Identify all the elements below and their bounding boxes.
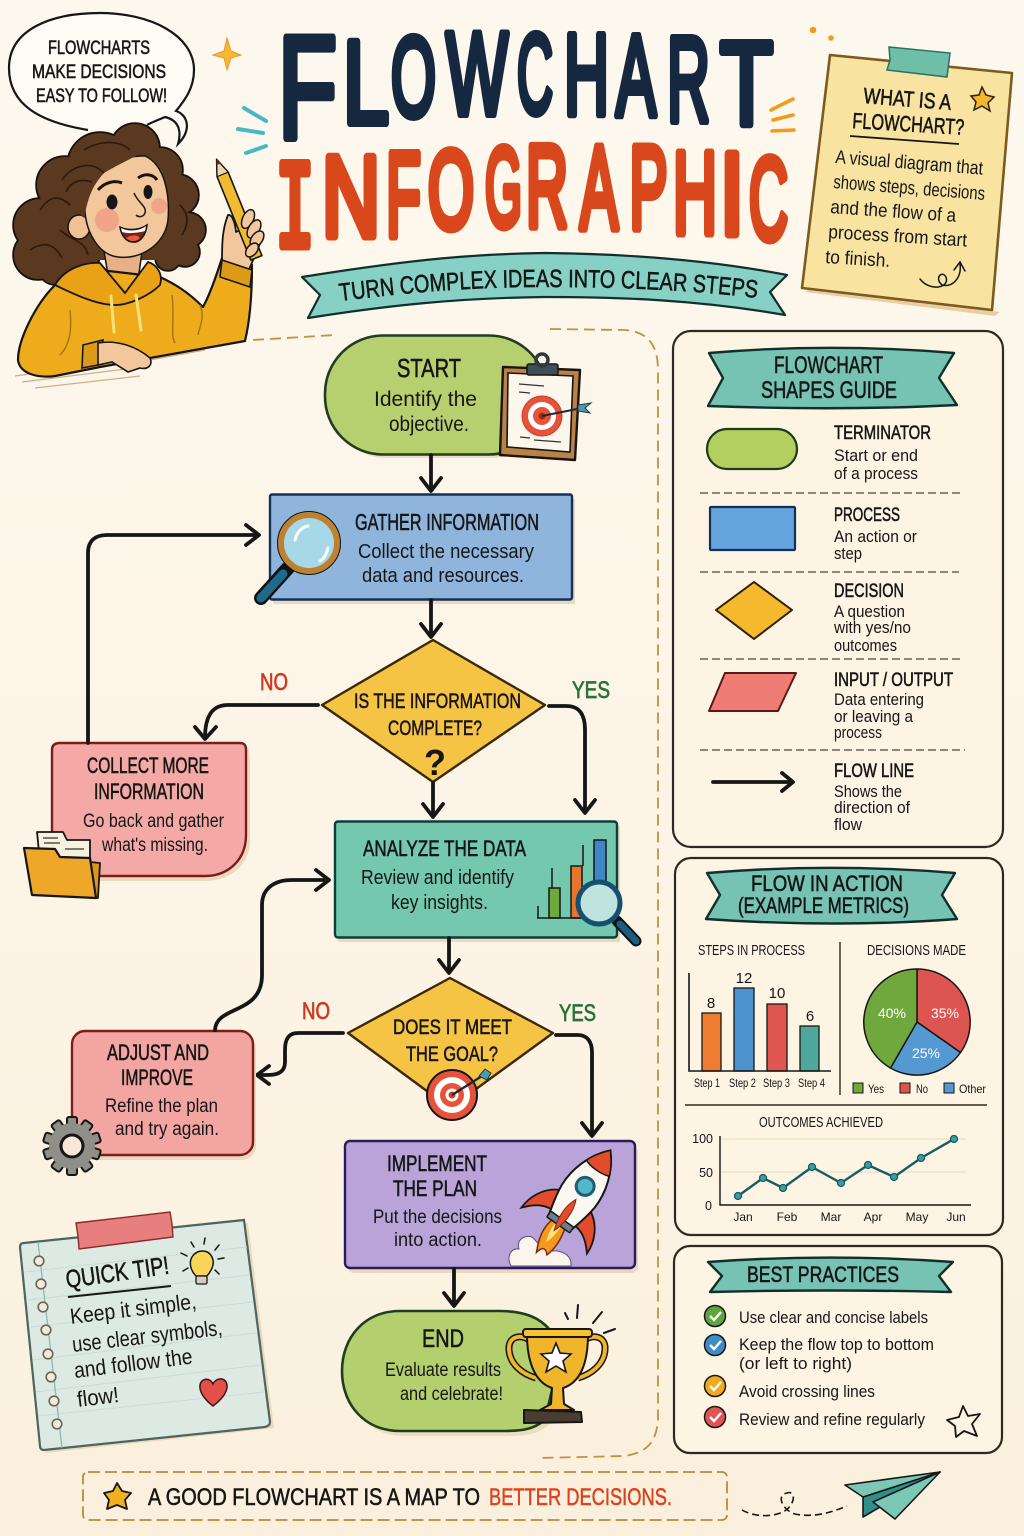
note: quick tip: use clear symbols, — [71, 1315, 224, 1357]
speech bubble: MAKE DECISIONS — [32, 62, 166, 83]
face — [85, 156, 168, 257]
panel: flow in action: (EXAMPLE METRICS) — [738, 893, 909, 918]
panel: shapes guide: SHAPES GUIDE — [761, 377, 897, 404]
title: FLOWCHART: H — [564, 11, 609, 139]
desk lines — [15, 350, 205, 388]
node: start: Identify the — [374, 388, 477, 411]
item: terminator: Start or end — [834, 447, 918, 465]
note: quick tip: and follow the — [73, 1344, 194, 1383]
hair — [14, 124, 205, 284]
note: what is a flowchart: to finish. — [825, 247, 891, 272]
title: INFOGRAPHIC: R — [526, 121, 568, 251]
callout: bottom banner — [83, 1472, 727, 1520]
node: gather information: Collect the necessary — [358, 541, 534, 563]
line chart: outcomes achieved: OUTCOMES ACHIEVED — [759, 1115, 883, 1131]
item: terminator — [707, 423, 931, 483]
node: collect more information: Go back and gather — [83, 811, 225, 832]
note: quick tip — [20, 1212, 274, 1453]
arrow: complete to analyze — [423, 783, 443, 817]
bar chart: steps in process: STEPS IN PROCESS — [698, 943, 805, 959]
panel: flow in action: FLOW IN ACTION — [751, 871, 903, 896]
pie chart: decisions made: DECISIONS MADE — [867, 943, 966, 959]
note: what is a flowchart: and the flow of a — [830, 197, 957, 227]
node: analyze the data: Review and identify — [361, 867, 514, 889]
item: process: An action or — [834, 528, 917, 546]
node: start: START — [397, 353, 461, 383]
label: yes: YES — [559, 1000, 596, 1027]
note: what is a flowchart: shows steps, decisions — [833, 172, 986, 205]
pie chart: decisions made: 35% — [931, 1005, 959, 1021]
fingers — [239, 208, 267, 259]
icon: paper plane with dashed trail — [742, 1472, 940, 1519]
item: process — [710, 505, 917, 563]
ear — [68, 215, 90, 239]
node: end: END — [422, 1325, 464, 1353]
arrow: no to collect — [195, 705, 318, 739]
note: quick tip: Keep it simple, — [69, 1289, 198, 1329]
neck — [103, 245, 143, 293]
node: decision complete: ? — [424, 742, 446, 783]
binder holes — [34, 1256, 62, 1429]
node: implement the plan — [345, 1141, 638, 1273]
arrow: yes to analyze — [549, 706, 595, 813]
icon: outline star — [947, 1406, 980, 1437]
node: gather information — [270, 494, 575, 604]
tape — [76, 1212, 173, 1249]
legend — [853, 1082, 986, 1096]
squiggle arrow — [920, 262, 965, 287]
node: adjust and improve: and try again. — [115, 1119, 219, 1140]
item: input output: Data entering — [834, 691, 924, 709]
title: INFOGRAPHIC: P — [630, 122, 668, 254]
item: input output — [709, 670, 953, 742]
node: adjust and improve: IMPROVE — [121, 1065, 193, 1090]
bar chart: steps in process: Step 2 — [729, 1078, 756, 1090]
node: start — [325, 336, 550, 458]
title: FLOWCHART: F — [278, 6, 337, 169]
node: gather information: data and resources. — [362, 565, 524, 587]
hoodie body — [18, 258, 252, 377]
item: process: PROCESS — [834, 505, 900, 526]
note: what is a flowchart: WHAT IS A — [863, 83, 953, 115]
title: INFOGRAPHIC: A — [580, 122, 618, 254]
checklist: Keep the flow top to bottom — [739, 1335, 934, 1354]
node: implement the plan: Put the decisions — [373, 1207, 502, 1228]
illustration: girl with pencil — [14, 124, 267, 388]
note: what is a flowchart: A visual diagram that — [835, 147, 984, 180]
bar chart: steps in process: Step 3 — [763, 1078, 790, 1090]
note: quick tip: QUICK TIP! — [64, 1252, 171, 1294]
bar chart: steps in process: 6 — [806, 1008, 814, 1025]
icon: light bulb — [181, 1238, 224, 1284]
item: decision: outcomes — [834, 637, 897, 655]
accent: teal dashes — [238, 108, 266, 153]
ribbon — [708, 348, 957, 408]
title: INFOGRAPHIC: I — [720, 129, 744, 259]
legend: No — [916, 1082, 928, 1096]
icon: trophy — [509, 1305, 615, 1423]
pie chart: decisions made — [853, 943, 986, 1096]
node: collect more information — [52, 743, 250, 881]
item: process: step — [834, 545, 862, 563]
title: INFOGRAPHIC: F — [386, 128, 421, 262]
item: terminator: TERMINATOR — [834, 423, 931, 444]
node: collect more information: what's missing. — [101, 835, 208, 856]
title: FLOWCHART — [278, 6, 773, 169]
icon: sparkle star — [213, 38, 241, 70]
title: FLOWCHART: C — [517, 11, 553, 137]
callout: bottom banner: BETTER DECISIONS. — [489, 1484, 672, 1511]
item: flow line: FLOW LINE — [834, 761, 914, 782]
node: adjust and improve: Refine the plan — [105, 1096, 218, 1117]
node: analyze the data: ANALYZE THE DATA — [363, 836, 526, 861]
node: end — [342, 1311, 556, 1436]
subtitle ribbon — [300, 252, 788, 320]
arrow: start to gather — [421, 455, 441, 491]
speech bubble — [9, 13, 194, 144]
title: FLOWCHART: R — [667, 11, 710, 147]
node: end: and celebrate! — [400, 1384, 503, 1405]
title: FLOWCHART: T — [720, 18, 773, 150]
item: decision: DECISION — [834, 581, 904, 602]
title: INFOGRAPHIC: G — [485, 125, 522, 250]
legend: Yes — [868, 1082, 884, 1096]
bar chart: steps in process: 10 — [769, 985, 785, 1002]
arrow: analyze to goal — [439, 938, 459, 973]
icon: bars and magnifier — [537, 840, 636, 941]
node: decision complete: COMPLETE? — [388, 716, 482, 740]
item: flow line: flow — [834, 816, 862, 834]
ribbon — [708, 1258, 953, 1292]
bar chart: steps in process: 8 — [707, 995, 715, 1012]
speech bubble: FLOWCHARTS — [48, 38, 150, 59]
checklist: Review and refine regularly — [739, 1410, 925, 1429]
title: FLOWCHART: O — [391, 14, 436, 140]
item: decision — [716, 581, 911, 655]
checklist: Avoid crossing lines — [739, 1382, 875, 1401]
node: adjust and improve: ADJUST AND — [107, 1040, 209, 1065]
title: INFOGRAPHIC: I — [275, 142, 315, 284]
node: end: Evaluate results — [385, 1360, 501, 1381]
pie chart: decisions made: 25% — [912, 1045, 940, 1061]
node: decision goal — [348, 978, 553, 1108]
note: what is a flowchart: FLOWCHART? — [852, 108, 965, 140]
line chart: outcomes achieved: Jan — [733, 1210, 753, 1224]
icon: magnifying glass — [261, 512, 340, 598]
arrow: adjust back to analyze — [215, 870, 329, 1030]
pie chart: decisions made: 40% — [878, 1005, 906, 1021]
panel: flow in action — [675, 858, 1003, 1235]
tape — [887, 47, 950, 77]
accent: orange dashes and dots — [771, 28, 832, 131]
title: INFOGRAPHIC: H — [673, 128, 717, 258]
title: INFOGRAPHIC — [275, 121, 788, 284]
bar chart: steps in process: Step 4 — [798, 1078, 825, 1090]
label: yes: YES — [572, 677, 610, 704]
node: adjust and improve — [72, 1031, 256, 1160]
arrow: collect back to gather — [88, 525, 259, 743]
ribbon — [706, 868, 957, 924]
icon: clipboard with target — [500, 354, 591, 460]
smoke — [509, 1236, 571, 1266]
node: implement the plan: into action. — [394, 1230, 482, 1251]
checklist: (or left to right) — [739, 1354, 852, 1373]
panel: best practices — [674, 1246, 1002, 1453]
label: no: NO — [260, 669, 288, 696]
legend: Other — [959, 1082, 986, 1096]
bar chart: steps in process: 12 — [736, 970, 752, 987]
checklist: Use clear and concise labels — [739, 1308, 928, 1327]
node: analyze the data — [335, 822, 620, 942]
title: FLOWCHART: A — [616, 12, 656, 140]
panel: shapes guide — [673, 331, 1003, 847]
arrow: gather to decision — [421, 600, 441, 637]
note: quick tip: flow! — [76, 1382, 120, 1412]
node: analyze the data: key insights. — [391, 892, 488, 914]
item: input output: or leaving a — [834, 708, 914, 726]
pencil — [211, 157, 262, 260]
icon: folder — [24, 832, 100, 898]
item: flow line — [713, 761, 914, 834]
bar chart: steps in process: Step 1 — [694, 1078, 720, 1090]
line chart: outcomes achieved: 0 — [705, 1199, 712, 1213]
checklist — [704, 1306, 934, 1429]
bar chart: steps in process — [689, 943, 831, 1090]
hood — [55, 262, 161, 305]
lower hand — [98, 342, 151, 372]
node: implement the plan: IMPLEMENT — [387, 1151, 487, 1176]
line chart: outcomes achieved — [692, 1115, 971, 1224]
icon: star — [971, 87, 994, 111]
item: terminator: of a process — [834, 465, 918, 483]
node: decision goal: DOES IT MEET — [393, 1015, 512, 1039]
icon: gear — [43, 1117, 101, 1175]
item: decision: A question — [834, 603, 905, 621]
hair fringe — [64, 136, 141, 218]
arrow: yes to implement — [556, 1035, 602, 1136]
note: what is a flowchart — [802, 47, 1012, 316]
node: start: objective. — [389, 413, 469, 436]
lower cuff — [82, 340, 103, 368]
title: INFOGRAPHIC: O — [428, 129, 474, 252]
item: flow line: direction of — [834, 799, 910, 817]
icon: star — [104, 1483, 131, 1509]
icon: rocket — [505, 1127, 643, 1276]
node: gather information: GATHER INFORMATION — [355, 509, 539, 535]
node: collect more information: COLLECT MORE — [87, 753, 209, 778]
text: C — [749, 134, 788, 264]
item: input output: INPUT / OUTPUT — [834, 670, 953, 691]
icon: heart — [200, 1379, 227, 1406]
arrow: no to adjust — [257, 1033, 343, 1084]
line chart: outcomes achieved: Apr — [864, 1210, 882, 1224]
node: collect more information: INFORMATION — [94, 779, 204, 804]
callout: bottom banner: A GOOD FLOWCHART IS A MAP TO — [148, 1484, 480, 1511]
icon: target — [427, 1069, 491, 1120]
item: decision: with yes/no — [833, 619, 911, 637]
line chart: outcomes achieved: Jun — [946, 1210, 966, 1224]
subtitle ribbon: TURN COMPLEX IDEAS INTO CLEAR STEPS — [338, 269, 758, 301]
flow area dashed border — [253, 329, 658, 1458]
node: decision complete: IS THE INFORMATION — [354, 689, 521, 713]
line chart: outcomes achieved: May — [906, 1210, 928, 1224]
node: decision goal: THE GOAL? — [406, 1042, 498, 1066]
arrow: implement to end — [444, 1269, 464, 1306]
line chart: outcomes achieved: Mar — [821, 1210, 841, 1224]
line chart: outcomes achieved: 50 — [699, 1166, 713, 1180]
title: FLOWCHART: W — [446, 8, 508, 139]
node: decision complete — [322, 640, 545, 783]
node: implement the plan: THE PLAN — [393, 1176, 477, 1201]
title: FLOWCHART: L — [343, 17, 389, 149]
item: flow line: Shows the — [834, 783, 902, 801]
speech bubble: EASY TO FOLLOW! — [36, 86, 167, 107]
line chart: outcomes achieved: 100 — [692, 1132, 713, 1146]
panel: shapes guide: FLOWCHART — [774, 352, 883, 379]
label: no: NO — [302, 998, 330, 1025]
raised palm — [222, 215, 262, 272]
line chart: outcomes achieved: Feb — [777, 1210, 798, 1224]
title: INFOGRAPHIC: N — [322, 134, 380, 261]
upper cuff — [220, 260, 252, 287]
item: input output: process — [834, 724, 882, 742]
panel: best practices: BEST PRACTICES — [747, 1262, 899, 1287]
note: what is a flowchart: process from start — [828, 222, 968, 252]
